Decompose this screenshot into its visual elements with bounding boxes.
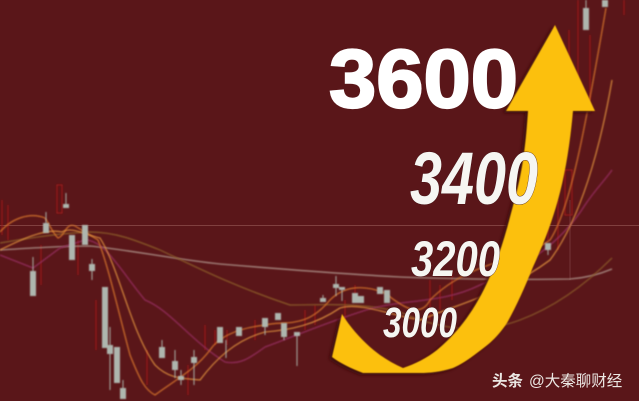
- moving average: gray long-term line: [0, 246, 612, 279]
- label: 3600: 3600: [329, 32, 518, 125]
- moving average: light orange line: [0, 80, 612, 380]
- crosshair lines: [0, 200, 639, 280]
- label: 3400: 3400: [410, 137, 538, 220]
- label: 3200: 3200: [411, 231, 500, 287]
- label: 3000: 3000: [383, 299, 457, 347]
- moving average: olive line: [0, 232, 612, 329]
- arrow shadow: [329, 27, 592, 375]
- watermark: 头条: [492, 371, 524, 390]
- icon: rising yellow arrow: [332, 25, 595, 373]
- watermark: @大秦聊财经: [529, 372, 622, 390]
- watermark: [492, 371, 622, 390]
- moving average: purple line: [0, 170, 612, 363]
